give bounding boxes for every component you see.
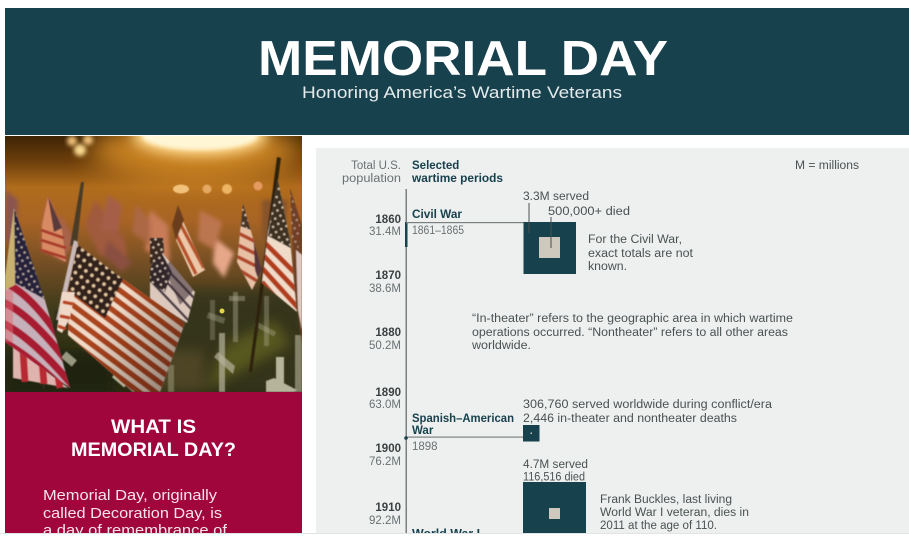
definition note: “In-theater” refers to the geographic area in which wartime: [472, 313, 793, 325]
panel: wartime timeline: [316, 148, 909, 537]
Civil War note: For the Civil War,: [588, 234, 682, 246]
ground: [191, 286, 294, 386]
Civil War note: [588, 234, 694, 273]
column heading: population: population: [342, 173, 401, 185]
column heading: population: Total U.S.: [351, 160, 401, 172]
definition note: operations occurred. “Nontheater” refers to all other areas: [472, 327, 788, 339]
World War I entry: [412, 459, 749, 537]
column heading: population: [342, 160, 401, 185]
World War I note: [600, 494, 749, 532]
panel body text: [43, 487, 228, 537]
decade labels: 31.4M: [369, 226, 401, 238]
panel: what is Memorial Day: [5, 392, 302, 537]
decade labels: 1860: [375, 214, 401, 226]
Spanish-American War entry: 1898: [412, 441, 438, 453]
definition note: worldwide.: [471, 340, 531, 352]
Spanish-American War square chart: [523, 425, 540, 442]
panel heading: WHAT IS: [111, 417, 196, 438]
timeline axis: [406, 189, 407, 535]
Spanish-American War entry: [404, 399, 773, 453]
Spanish-American War entry: 2,446 in-theater and nontheater deaths: [523, 413, 737, 425]
photo: flags at sunset in a cemetery: [5, 136, 302, 392]
right flag: [249, 157, 303, 372]
panel body text: called Decoration Day, is: [43, 505, 222, 522]
decade labels: [369, 214, 401, 527]
mid-distance flag cluster: [149, 237, 196, 324]
background flag: left: [41, 197, 66, 262]
decade labels: 76.2M: [369, 456, 401, 468]
Civil War entry: 3.3M served: [523, 191, 589, 203]
left flag: [5, 208, 70, 388]
legend note: M = millions: [795, 160, 859, 172]
background blurred flags: [5, 190, 288, 278]
Civil War note: exact totals are not: [588, 248, 694, 260]
Civil War entry: 1861–1865: [412, 225, 464, 237]
far right flag: [290, 188, 302, 345]
grave crosses: [61, 292, 302, 392]
Spanish-American War entry: War: [412, 425, 434, 437]
panel body text: Memorial Day, originally: [43, 487, 218, 504]
Civil War entry: [405, 191, 694, 274]
World War I entry: 4.7M served: [523, 459, 588, 471]
decade labels: 63.0M: [369, 399, 401, 411]
title: MEMORIAL DAY: [258, 32, 668, 86]
decade labels: 1900: [375, 443, 401, 455]
panel heading: [71, 417, 236, 461]
decade labels: 1890: [375, 387, 401, 399]
pole highlight and stub of main flag: [56, 240, 78, 320]
Civil War note: known.: [588, 261, 627, 273]
decade labels: 92.2M: [369, 515, 401, 527]
World War I note: 2011 at the age of 110.: [600, 520, 717, 532]
World War I note: World War I veteran, dies in: [600, 507, 749, 519]
decade labels: 1880: [375, 327, 401, 339]
Spanish-American War entry: 306,760 served worldwide during conflict/era: [523, 399, 773, 411]
lower strip of left flag: [13, 345, 68, 388]
column heading: wartime periods: wartime periods: [411, 173, 503, 185]
column heading: wartime periods: [411, 160, 503, 185]
World War I square chart: [523, 482, 586, 535]
Civil War square chart: [524, 203, 576, 274]
panel heading: MEMORIAL DAY?: [71, 440, 236, 461]
subtitle: Honoring America’s Wartime Veterans: [302, 83, 622, 102]
World War I entry: 116,516 died: [523, 472, 585, 484]
decade labels: 38.6M: [369, 283, 401, 295]
Civil War entry: 500,000+ died: [548, 206, 630, 218]
mid-distance flag 1: [172, 205, 206, 278]
decade labels: 50.2M: [369, 340, 401, 352]
Civil War entry: Civil War: [412, 209, 463, 221]
Spanish-American War entry: Spanish–American: [412, 413, 514, 425]
column heading: wartime periods: Selected: [412, 160, 459, 172]
mid-distance flag 2: [236, 203, 262, 290]
decade labels: 1910: [375, 502, 401, 514]
decade labels: 1870: [375, 270, 401, 282]
main flag: [67, 244, 186, 392]
World War I note: Frank Buckles, last living: [600, 494, 732, 506]
definition note: [471, 313, 793, 352]
header banner: [5, 8, 909, 135]
pole: main flag: [70, 182, 84, 246]
